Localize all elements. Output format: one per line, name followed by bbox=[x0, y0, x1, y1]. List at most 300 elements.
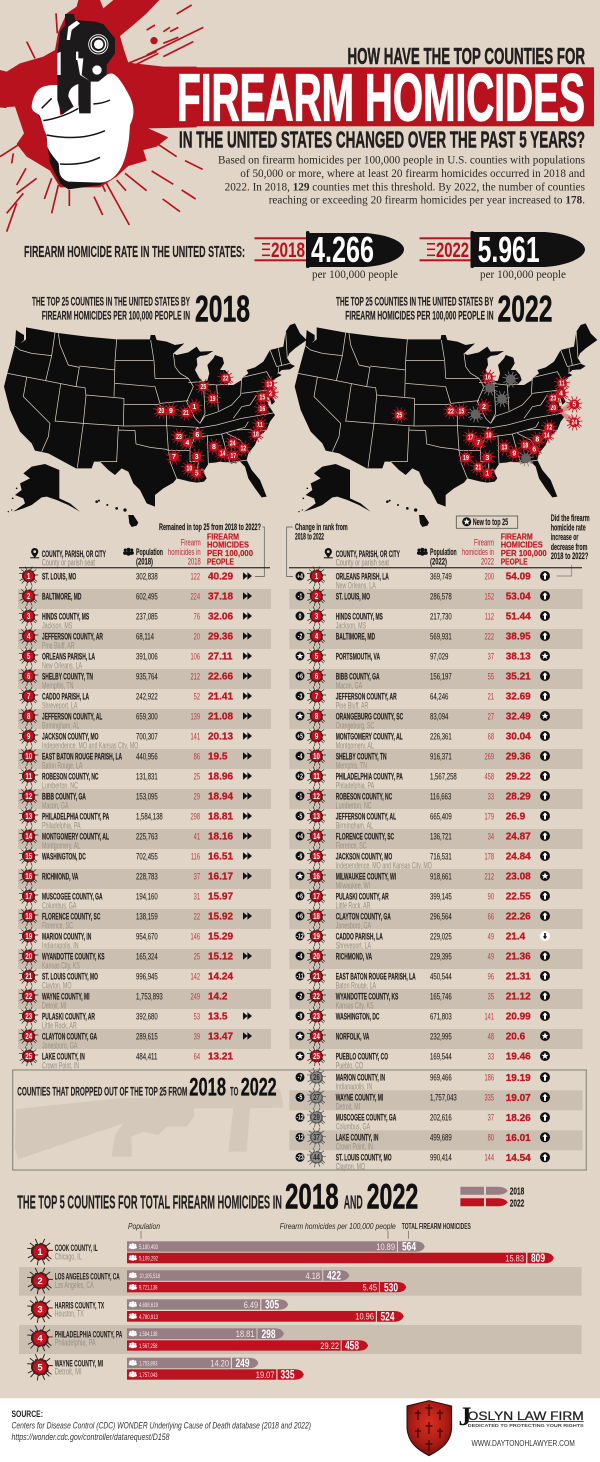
table header 2018: Firearm bbox=[181, 538, 201, 548]
row 27: 1,757,043 bbox=[430, 1092, 457, 1103]
row 14: 41 bbox=[194, 831, 200, 842]
row 8: 8 bbox=[27, 713, 30, 721]
row 19 bbox=[19, 926, 233, 951]
county 5: 1,753,893 bbox=[139, 1360, 158, 1368]
annotation: change in rank: Change in rank from bbox=[295, 522, 348, 532]
row 15: 15 bbox=[25, 853, 32, 861]
row 14: 14 bbox=[25, 833, 32, 841]
row 11: 11 bbox=[26, 773, 32, 781]
source: Centers for Disease Control (CDC) WONDER Underlying Cause of Death database (2018 and 2022) bbox=[12, 1420, 311, 1430]
row 7: 7 bbox=[315, 693, 318, 701]
row 3: 51.44 bbox=[506, 612, 531, 623]
row 21: 21 bbox=[313, 973, 320, 981]
row 20: 20 bbox=[25, 953, 32, 961]
row 17: 17 bbox=[313, 893, 320, 901]
source bbox=[12, 1409, 311, 1442]
row 2: 2 bbox=[315, 593, 318, 601]
row 24: 20.6 bbox=[506, 1032, 526, 1043]
row 10: 29.36 bbox=[506, 752, 531, 763]
legend: new to top 25: New to top 25 bbox=[473, 517, 509, 528]
table: top 25 counties 2018 bbox=[18, 522, 271, 1071]
table header 2018: COUNTY, PARISH, OR CITY bbox=[42, 549, 106, 560]
row 44: Clayton, MO bbox=[336, 1161, 365, 1172]
row 12: -1 bbox=[298, 793, 303, 801]
heading: top 5 counties bbox=[17, 1177, 418, 1216]
row 27: WAYNE COUNTY, MI bbox=[336, 1092, 383, 1103]
heading: top 5 counties: 2022 bbox=[367, 1177, 418, 1216]
table header 2022: COUNTY, PARISH, OR CITY bbox=[336, 549, 400, 560]
row 22: 21.12 bbox=[506, 992, 531, 1003]
map markers 2018: 14 bbox=[220, 451, 226, 458]
row 25: 169,544 bbox=[430, 1051, 452, 1062]
map markers 2018: 12 bbox=[240, 446, 246, 453]
row 25: 19.46 bbox=[506, 1052, 531, 1063]
row 20: Kansas City, KS bbox=[42, 960, 80, 971]
row 22 bbox=[289, 986, 583, 1011]
row 12: 12 bbox=[25, 793, 32, 801]
row 4: 4 bbox=[315, 633, 318, 641]
row 25: 484,411 bbox=[136, 1051, 158, 1062]
row 44 bbox=[296, 1148, 550, 1172]
row 5 bbox=[19, 646, 252, 671]
row 20: 49 bbox=[488, 951, 494, 962]
table header 2018: (2018) bbox=[136, 556, 153, 568]
row 37: 80 bbox=[488, 1132, 494, 1143]
county 3: 6.49 bbox=[244, 1300, 258, 1311]
row 7 bbox=[296, 686, 550, 711]
row 15: -6 bbox=[298, 853, 303, 861]
row 10: 269 bbox=[484, 751, 494, 762]
row 13: JEFFERSON COUNTY, AL bbox=[336, 811, 396, 822]
row 2 bbox=[18, 586, 271, 609]
row 14: FLORENCE COUNTY, SC bbox=[336, 831, 394, 842]
row 23: PULASKI COUNTY, AR bbox=[42, 1011, 95, 1022]
row 29: MUSCOGEE COUNTY, GA bbox=[336, 1112, 397, 1123]
row 24: 24 bbox=[25, 1033, 32, 1041]
row 44: 44 bbox=[313, 1154, 320, 1162]
row 26 bbox=[296, 1068, 550, 1092]
row 23: 23 bbox=[313, 1013, 320, 1021]
county 4: 29.22 bbox=[320, 1341, 339, 1352]
county 4: 1,567,258 bbox=[139, 1343, 158, 1350]
row 8 bbox=[18, 706, 271, 731]
row 7: Shreveport, LA bbox=[42, 700, 77, 711]
row 20: -4 bbox=[298, 953, 303, 961]
row 19: 19 bbox=[25, 933, 32, 941]
county 1: 5,109,292 bbox=[139, 1256, 158, 1262]
row 21: 14.24 bbox=[208, 972, 233, 983]
map markers 2022: 19 bbox=[463, 455, 469, 462]
row 6: BIBB COUNTY, GA bbox=[336, 671, 380, 682]
county 1: COOK COUNTY, IL bbox=[55, 1243, 98, 1254]
row 2 bbox=[289, 586, 583, 609]
row 25 bbox=[296, 1046, 550, 1071]
row 5: 37 bbox=[488, 651, 494, 662]
row 27: Detroit, MI bbox=[336, 1101, 360, 1112]
box heading bbox=[17, 1074, 277, 1102]
row 2: 37.18 bbox=[208, 592, 233, 603]
row 18: 296,564 bbox=[430, 911, 452, 922]
bar chart: top 5 counties bbox=[19, 1239, 582, 1382]
row 8: Birmingham, AL bbox=[42, 720, 79, 731]
row 11 bbox=[296, 766, 550, 791]
row 4: 20 bbox=[194, 631, 200, 642]
map markers 2018: 8 bbox=[212, 444, 216, 451]
row 11: Lumberton, NC bbox=[42, 780, 78, 791]
row 27: -5 bbox=[298, 1094, 303, 1102]
row 19: 15.29 bbox=[208, 932, 233, 943]
hero illustration: fist with pistol on blood splatter bbox=[0, 0, 203, 232]
row 2: 602,495 bbox=[136, 591, 158, 602]
row 26: -7 bbox=[298, 1074, 303, 1082]
county 4: 18.81 bbox=[236, 1329, 254, 1340]
footer bbox=[0, 1398, 600, 1462]
row 2: 152 bbox=[484, 591, 494, 602]
row 12: 33 bbox=[488, 791, 494, 802]
row 22: 22 bbox=[25, 993, 32, 1001]
map markers 2018: 3 bbox=[195, 454, 199, 461]
row 20: 15.12 bbox=[208, 952, 233, 963]
map markers 2018: 21 bbox=[183, 410, 189, 417]
row 21: EAST BATON ROUGE PARISH, LA bbox=[336, 971, 416, 982]
row 19: Indianapolis, IN bbox=[42, 940, 79, 951]
map markers 2022: 24 bbox=[571, 420, 577, 427]
map markers 2022: 18 bbox=[522, 442, 528, 449]
row 9: 9 bbox=[27, 733, 30, 741]
row 12: Macon, GA bbox=[42, 800, 69, 811]
row 5: 5 bbox=[315, 653, 318, 661]
row 3: 0 bbox=[299, 613, 302, 621]
row 13: Birmingham, AL bbox=[336, 820, 373, 831]
county 5: 14.20 bbox=[210, 1358, 229, 1369]
row 5: 106 bbox=[190, 651, 200, 662]
row 17: Columbus, GA bbox=[42, 900, 77, 911]
table header 2022 bbox=[289, 532, 582, 568]
annotation: rate increase or decrease bbox=[551, 513, 590, 576]
row 15: 16.51 bbox=[208, 852, 233, 863]
row 17: +6 bbox=[297, 893, 303, 901]
map markers 2018: 15 bbox=[259, 395, 265, 402]
row 2: -1 bbox=[298, 593, 303, 601]
row 24 bbox=[289, 1026, 583, 1049]
row 23 bbox=[19, 1006, 252, 1031]
map markers 2022: 3 bbox=[485, 455, 489, 462]
row 6: 6 bbox=[27, 673, 30, 681]
row 12: 18.94 bbox=[208, 792, 233, 803]
row 18: Florence, SC bbox=[42, 920, 73, 931]
row 10: 916,371 bbox=[430, 751, 452, 762]
table header 2018: HOMICIDES bbox=[207, 541, 250, 550]
row 13: 13 bbox=[313, 813, 320, 821]
row 6: 35.21 bbox=[506, 672, 531, 683]
row 16: 37 bbox=[194, 871, 200, 882]
row 1: ST. LOUIS, MO bbox=[42, 571, 76, 582]
row 26: 969,466 bbox=[430, 1072, 452, 1083]
row 4 bbox=[289, 626, 583, 649]
row 14: 34 bbox=[488, 831, 494, 842]
map markers 2018: 18 bbox=[253, 431, 259, 438]
map markers 2022: 14 bbox=[544, 432, 550, 439]
intro paragraph bbox=[218, 153, 585, 207]
row 24: 232,995 bbox=[430, 1031, 452, 1042]
row 37 bbox=[289, 1128, 583, 1152]
map markers 2018: 1 bbox=[192, 404, 196, 411]
row 20: 21.36 bbox=[506, 952, 531, 963]
row 14: Florence, SC bbox=[336, 840, 367, 851]
map markers 2022: 20 bbox=[550, 405, 556, 412]
row 15: WASHINGTON, DC bbox=[42, 851, 86, 862]
row 9: JACKSON COUNTY, MO bbox=[42, 731, 99, 742]
row 7: 52 bbox=[194, 691, 200, 702]
row 15: 702,455 bbox=[136, 851, 158, 862]
row 8: 32.49 bbox=[506, 712, 531, 723]
county 5: WAYNE COUNTY, MI bbox=[55, 1358, 103, 1369]
county 5: 335 bbox=[280, 1368, 295, 1382]
row 1: 122 bbox=[190, 571, 200, 582]
row 21 bbox=[19, 966, 233, 991]
column captions: Population bbox=[128, 1221, 160, 1231]
row 13: 1,584,138 bbox=[136, 811, 163, 822]
row 13: Philadelphia, PA bbox=[42, 820, 81, 831]
row 21: 996,945 bbox=[136, 971, 158, 982]
map markers 2022: 12 bbox=[546, 425, 552, 432]
row 29: 37 bbox=[488, 1112, 494, 1123]
map markers 2018: 19 bbox=[210, 396, 216, 403]
map markers 2022: 21 bbox=[475, 465, 481, 472]
row 18: Jonesboro, GA bbox=[336, 920, 371, 931]
row 37: 37 bbox=[313, 1134, 320, 1142]
row 10: 440,956 bbox=[136, 751, 158, 762]
row 7: 7 bbox=[27, 693, 30, 701]
row 20: 165,324 bbox=[136, 951, 158, 962]
heading: top 5 counties: AND bbox=[344, 1192, 363, 1212]
row 23: WASHINGTON, DC bbox=[336, 1011, 380, 1022]
row 25: PUEBLO COUNTY, CO bbox=[336, 1051, 388, 1062]
row 25: Pueblo, CO bbox=[336, 1060, 363, 1071]
row 16 bbox=[18, 866, 271, 889]
map markers 2022: 8 bbox=[535, 437, 539, 444]
row 12: 29 bbox=[194, 791, 200, 802]
row 17: 22.55 bbox=[506, 892, 531, 903]
row 10: 86 bbox=[194, 751, 200, 762]
row 18: FLORENCE COUNTY, SC bbox=[42, 911, 101, 922]
row 1 bbox=[296, 566, 550, 591]
row 20: WYANDOTTE COUNTY, KS bbox=[42, 951, 105, 962]
table header 2022: County or parish seat bbox=[336, 557, 389, 567]
map markers 2018: 5 bbox=[195, 471, 199, 478]
box heading: 2018 bbox=[189, 1074, 226, 1102]
row 3: 3 bbox=[315, 613, 318, 621]
row 6: 935,764 bbox=[136, 671, 158, 682]
table header 2018 bbox=[19, 532, 270, 568]
row 4: 38.95 bbox=[506, 632, 531, 643]
county 2: Los Angeles, CA bbox=[55, 1280, 94, 1290]
county 5: Detroit, MI bbox=[55, 1366, 82, 1376]
row 25: 33 bbox=[488, 1051, 494, 1062]
map markers 2018: 4 bbox=[185, 440, 189, 447]
annotation: change in rank: 2018 to 2022 bbox=[295, 532, 324, 542]
row 1: 369,749 bbox=[430, 571, 452, 582]
bullet 2018 rate: 2018 bbox=[271, 239, 305, 262]
legend: bar colours: 2018 bbox=[510, 1186, 525, 1198]
row 8 bbox=[289, 706, 583, 731]
row 4: 29.36 bbox=[208, 632, 233, 643]
row 21: Baton Rouge, LA bbox=[336, 980, 376, 991]
annotation: rate increase or decrease: increase or bbox=[551, 532, 579, 542]
map markers 2022: 9 bbox=[512, 451, 516, 458]
bullet 2018 rate bbox=[254, 229, 404, 281]
row 1: +4 bbox=[297, 573, 303, 581]
annotation: change in rank bbox=[287, 522, 348, 576]
bullet 2022 rate: 2022 bbox=[436, 239, 469, 262]
table header 2018: FIREARM bbox=[207, 532, 239, 541]
map markers 2022: 11 bbox=[559, 381, 565, 388]
county 4 bbox=[27, 1325, 368, 1353]
table header 2018: homicides in bbox=[168, 547, 201, 558]
county 1: 5,180,493 bbox=[139, 1244, 158, 1251]
row 17: MUSCOGEE COUNTY, GA bbox=[42, 891, 103, 902]
row 7: 32.69 bbox=[506, 692, 531, 703]
row 19: 954,670 bbox=[136, 931, 158, 942]
row 16: 212 bbox=[484, 871, 494, 882]
county 2: 2 bbox=[37, 1276, 43, 1287]
row 4: 4 bbox=[27, 633, 30, 641]
map markers 2018: 2 bbox=[269, 391, 273, 398]
table header 2022: 2022 bbox=[481, 556, 494, 568]
row 13: PHILADELPHIA COUNTY, PA bbox=[42, 811, 110, 822]
row 12: Lumberton, NC bbox=[336, 800, 372, 811]
row 14: 136,721 bbox=[430, 831, 452, 842]
row 10 bbox=[289, 746, 583, 771]
county 4: 458 bbox=[345, 1339, 359, 1353]
row 23 bbox=[296, 1006, 550, 1026]
row 16: 16.17 bbox=[208, 872, 233, 883]
row 12: BIBB COUNTY, GA bbox=[42, 791, 86, 802]
annotation: remained in top 25 bbox=[159, 522, 264, 576]
map markers 2022: 4 bbox=[559, 391, 563, 398]
row 11: ROBESON COUNTY, NC bbox=[42, 771, 99, 782]
row 17: 17 bbox=[25, 893, 32, 901]
row 4: JEFFERSON COUNTY, AR bbox=[42, 631, 103, 642]
row 29: 202,616 bbox=[430, 1112, 452, 1123]
row 13: 179 bbox=[484, 811, 494, 822]
map markers 2018: 24 bbox=[230, 441, 236, 448]
heading: 2018 map bbox=[32, 289, 250, 330]
row 26: MARION COUNTY, IN bbox=[336, 1072, 385, 1083]
map markers 2022: 17 bbox=[468, 435, 474, 442]
row 2: BALTIMORE, MD bbox=[42, 591, 82, 602]
column captions: TOTAL FIREARM HOMICIDES bbox=[402, 1221, 471, 1231]
heading: 2022 map: FIREARM HOMICIDES PER 100,000 PEOPLE IN bbox=[345, 310, 494, 322]
row 9 bbox=[296, 726, 550, 751]
box heading: TO bbox=[230, 1087, 238, 1099]
row 8: JEFFERSON COUNTY, AL bbox=[42, 711, 103, 722]
source: https://wonder.cdc.gov/controller/datarequest/D158 bbox=[12, 1432, 170, 1442]
map markers 2018 bbox=[153, 370, 279, 481]
row 21: ST. LOUIS COUNTY, MO bbox=[42, 971, 98, 982]
county 1: 809 bbox=[531, 1251, 545, 1265]
row 6: 212 bbox=[190, 671, 200, 682]
county 1: 10.89 bbox=[376, 1242, 395, 1253]
row 16: Milwaukee, WI bbox=[336, 880, 370, 891]
table header 2022: FIREARM bbox=[501, 532, 533, 541]
map markers 2018: 7 bbox=[172, 454, 176, 461]
row 18: 22 bbox=[194, 911, 200, 922]
heading: 2018 map: THE TOP 25 COUNTIES IN THE UNITED STATES BY bbox=[32, 296, 190, 308]
table header 2022: Population bbox=[430, 547, 457, 558]
row 22: 249 bbox=[190, 991, 200, 1002]
pistol bbox=[57, 14, 115, 115]
row 2: 53.04 bbox=[506, 592, 531, 603]
row 5: ORLEANS PARISH, LA bbox=[42, 651, 95, 662]
row 16: 228,783 bbox=[136, 871, 158, 882]
row 3: 76 bbox=[194, 611, 200, 622]
bullet 2018 rate: per 100,000 people bbox=[312, 267, 398, 281]
map markers 2018: 6 bbox=[195, 432, 199, 439]
row 20: RICHMOND, VA bbox=[336, 951, 372, 962]
row 21: 21 bbox=[25, 973, 32, 981]
table header 2022: PEOPLE bbox=[501, 558, 528, 567]
legend: bar colours: 2022 bbox=[510, 1198, 525, 1210]
row 27 bbox=[289, 1088, 583, 1112]
map markers 2018: 23 bbox=[176, 434, 182, 441]
box heading: 2022 bbox=[241, 1074, 277, 1102]
row 25: 25 bbox=[313, 1053, 320, 1061]
row 44: 14.54 bbox=[506, 1153, 531, 1164]
row 29: 18.26 bbox=[506, 1113, 531, 1124]
row 7 bbox=[19, 686, 252, 711]
map markers 2018: 9 bbox=[169, 408, 173, 415]
row 9: 700,307 bbox=[136, 731, 158, 742]
row 17: PULASKI COUNTY, AR bbox=[336, 891, 389, 902]
row 9: 9 bbox=[315, 733, 318, 741]
row 18: 18 bbox=[25, 913, 32, 921]
row 18: 66 bbox=[488, 911, 494, 922]
row 26: 186 bbox=[484, 1072, 494, 1083]
row 21: Clayton, MO bbox=[42, 980, 72, 991]
row 9: 141 bbox=[190, 731, 200, 742]
law firm wordmark: DEDICATED TO PROTECTING YOUR RIGHTS bbox=[468, 1423, 584, 1428]
row 13 bbox=[19, 806, 252, 831]
row 19: 21.4 bbox=[506, 932, 526, 943]
row 1 bbox=[19, 566, 252, 586]
row 15: 24.84 bbox=[506, 852, 531, 863]
bullet 2022 rate: per 100,000 people bbox=[480, 267, 566, 281]
heading: 2018 map: 2018 bbox=[195, 289, 250, 330]
intro paragraph: Based on firearm homicides per 100,000 people in U.S. counties with populations bbox=[218, 153, 585, 167]
row 6: 6 bbox=[315, 673, 318, 681]
row 21: 96 bbox=[488, 971, 494, 982]
row 19: CADDO PARISH, LA bbox=[336, 931, 383, 942]
row 5: New Orleans, LA bbox=[42, 660, 82, 671]
row 10: SHELBY COUNTY, TN bbox=[336, 751, 387, 762]
row 14 bbox=[289, 826, 583, 851]
row 11: 29.22 bbox=[506, 772, 531, 783]
county 2: LOS ANGELES COUNTY, CA bbox=[55, 1272, 120, 1283]
row 1: 54.09 bbox=[506, 572, 531, 583]
title banner bbox=[190, 67, 594, 126]
map markers 2022: 23 bbox=[550, 396, 556, 403]
row 12: 28.29 bbox=[506, 792, 531, 803]
county 2: 4.18 bbox=[306, 1271, 320, 1282]
row 22: WYANDOTTE COUNTY, KS bbox=[336, 991, 398, 1002]
row 13: 26.9 bbox=[506, 812, 526, 823]
row 23: 141 bbox=[484, 1011, 494, 1022]
row 22: Detroit, MI bbox=[42, 1000, 66, 1011]
row 23: 23 bbox=[25, 1013, 32, 1021]
map markers 2018: 17 bbox=[230, 453, 236, 460]
row 11: 131,831 bbox=[136, 771, 158, 782]
